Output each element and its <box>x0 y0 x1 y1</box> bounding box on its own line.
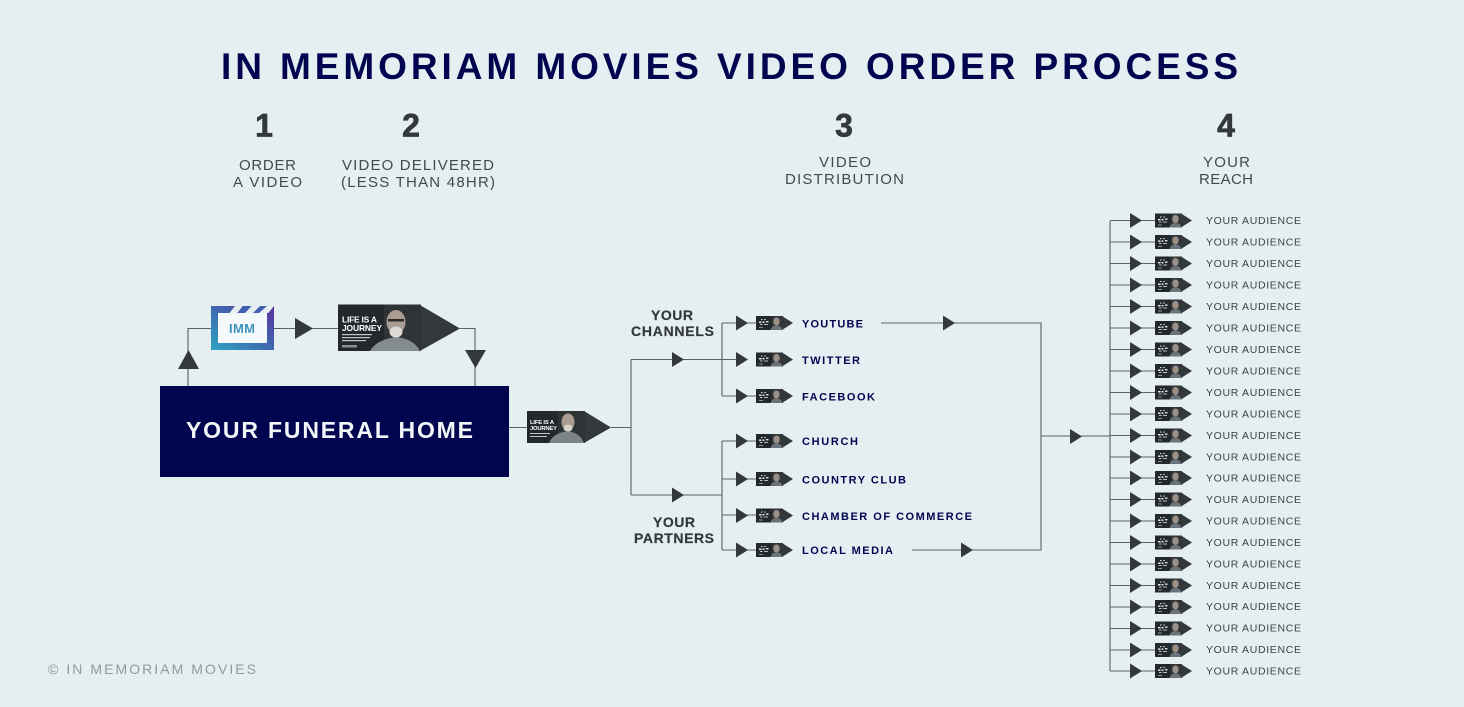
arrow: to partners <box>672 488 684 502</box>
step 1 heading: A VIDEO <box>233 174 302 191</box>
partner: local media <box>736 542 893 558</box>
audience row 14: YOUR AUDIENCE <box>1206 494 1301 506</box>
step 1 heading: ORDER <box>239 157 296 174</box>
step 4 heading: YOUR <box>1203 154 1250 171</box>
video thumbnail medium: LIFE IS A <box>530 420 555 426</box>
your channels label <box>631 307 714 339</box>
audience row 20 <box>1130 621 1301 636</box>
audience row 17: YOUR AUDIENCE <box>1206 558 1301 570</box>
audience row 22: YOUR AUDIENCE <box>1206 666 1301 678</box>
copyright footer: © IN MEMORIAM MOVIES <box>48 661 256 677</box>
audience row 10: YOUR AUDIENCE <box>1206 408 1301 420</box>
audience row 9: YOUR AUDIENCE <box>1206 387 1301 399</box>
audience row 20: YOUR AUDIENCE <box>1206 622 1301 634</box>
audience row 19: YOUR AUDIENCE <box>1206 601 1301 613</box>
arrow: local media to reach <box>961 542 973 558</box>
partner: local media: LOCAL MEDIA <box>802 545 893 557</box>
audience row 4 <box>1130 278 1301 292</box>
title: IN MEMORIAM MOVIES VIDEO ORDER PROCESS <box>221 46 1238 87</box>
video thumbnail large: JOURNEY <box>342 323 382 333</box>
video thumbnail medium: JOURNEY <box>530 426 557 432</box>
step 1 heading: 1 <box>255 108 273 144</box>
audience row 21: YOUR AUDIENCE <box>1206 644 1301 656</box>
your partners label: PARTNERS <box>634 530 714 546</box>
partner: chamber of commerce <box>736 508 972 523</box>
channel: youtube <box>736 316 863 330</box>
partner: country club <box>736 472 906 486</box>
step 3 heading: VIDEO <box>819 154 871 171</box>
partner: church: CHURCH <box>802 436 858 448</box>
audience row 6 <box>1130 320 1301 336</box>
step 3 heading: 3 <box>835 108 853 144</box>
your funeral home box: YOUR FUNERAL HOME <box>186 417 473 443</box>
distribution connectors <box>509 221 1110 671</box>
step 1 heading <box>233 108 302 191</box>
audience row 5: YOUR AUDIENCE <box>1206 301 1301 313</box>
step 4 heading: 4 <box>1217 108 1235 144</box>
audience row 21 <box>1130 642 1301 658</box>
your funeral home box <box>160 386 509 477</box>
audience row 15 <box>1130 514 1301 528</box>
your partners label: YOUR <box>653 514 695 530</box>
audience row 12 <box>1130 450 1301 464</box>
audience row 6: YOUR AUDIENCE <box>1206 322 1301 334</box>
arrow: into reach <box>1070 429 1082 444</box>
audience row 3 <box>1130 256 1301 271</box>
video thumbnail medium <box>527 411 611 443</box>
arrow up <box>178 350 199 369</box>
audience row 1 <box>1130 213 1301 228</box>
icon: IMM clapperboard: IMM <box>229 321 255 336</box>
arrow right <box>295 318 313 339</box>
audience row 18: YOUR AUDIENCE <box>1206 580 1301 592</box>
audience row 17 <box>1130 556 1301 572</box>
video thumbnail large: LIFE IS A <box>342 314 377 324</box>
channel: youtube: YOUTUBE <box>802 318 863 330</box>
step 3 heading: DISTRIBUTION <box>785 171 904 188</box>
audience row 16 <box>1130 535 1301 550</box>
channel: twitter: TWITTER <box>802 355 860 367</box>
your channels label: YOUR <box>651 307 693 323</box>
arrow: youtube to reach <box>943 316 955 330</box>
audience row 1: YOUR AUDIENCE <box>1206 215 1301 227</box>
step 4 heading <box>1199 108 1253 188</box>
step 2 heading: 2 <box>402 108 420 144</box>
step 4 heading: REACH <box>1199 171 1253 188</box>
audience row 22 <box>1130 664 1301 678</box>
audience row 7: YOUR AUDIENCE <box>1206 344 1301 356</box>
your partners label <box>634 514 714 546</box>
audience row 15: YOUR AUDIENCE <box>1206 516 1301 528</box>
channel: facebook <box>736 388 875 404</box>
step 2 heading: (LESS THAN 48HR) <box>341 174 495 191</box>
audience row 2: YOUR AUDIENCE <box>1206 236 1301 248</box>
audience row 19 <box>1130 600 1301 614</box>
your channels label: CHANNELS <box>631 323 714 339</box>
partner: chamber of commerce: CHAMBER OF COMMERCE <box>802 511 972 523</box>
audience row 3: YOUR AUDIENCE <box>1206 258 1301 270</box>
arrow: to channels <box>672 352 684 367</box>
audience row 8 <box>1130 364 1301 378</box>
audience row 9 <box>1130 385 1301 400</box>
audience row 8: YOUR AUDIENCE <box>1206 366 1301 378</box>
audience row 16: YOUR AUDIENCE <box>1206 537 1301 549</box>
video thumbnail large <box>338 304 460 352</box>
audience row 4: YOUR AUDIENCE <box>1206 280 1301 292</box>
audience row 10 <box>1130 406 1301 422</box>
arrow down <box>465 350 486 368</box>
order flow connectors <box>188 328 475 386</box>
partner: country club: COUNTRY CLUB <box>802 474 906 486</box>
channel: twitter <box>736 352 860 367</box>
step 2 heading <box>341 108 495 191</box>
audience list <box>1110 213 1301 678</box>
step 2 heading: VIDEO DELIVERED <box>342 157 494 174</box>
audience row 2 <box>1130 234 1301 250</box>
audience row 13: YOUR AUDIENCE <box>1206 472 1301 484</box>
step 3 heading <box>785 108 904 188</box>
audience row 5 <box>1130 299 1301 314</box>
audience row 7 <box>1130 342 1301 357</box>
icon: IMM clapperboard <box>211 306 274 350</box>
audience row 13 <box>1130 470 1301 486</box>
partner: church <box>736 434 858 448</box>
audience row 12: YOUR AUDIENCE <box>1206 452 1301 464</box>
channel: facebook: FACEBOOK <box>802 392 875 404</box>
audience row 14 <box>1130 492 1301 507</box>
audience row 11: YOUR AUDIENCE <box>1206 430 1301 442</box>
audience row 11 <box>1130 428 1301 443</box>
audience row 18 <box>1130 578 1301 593</box>
